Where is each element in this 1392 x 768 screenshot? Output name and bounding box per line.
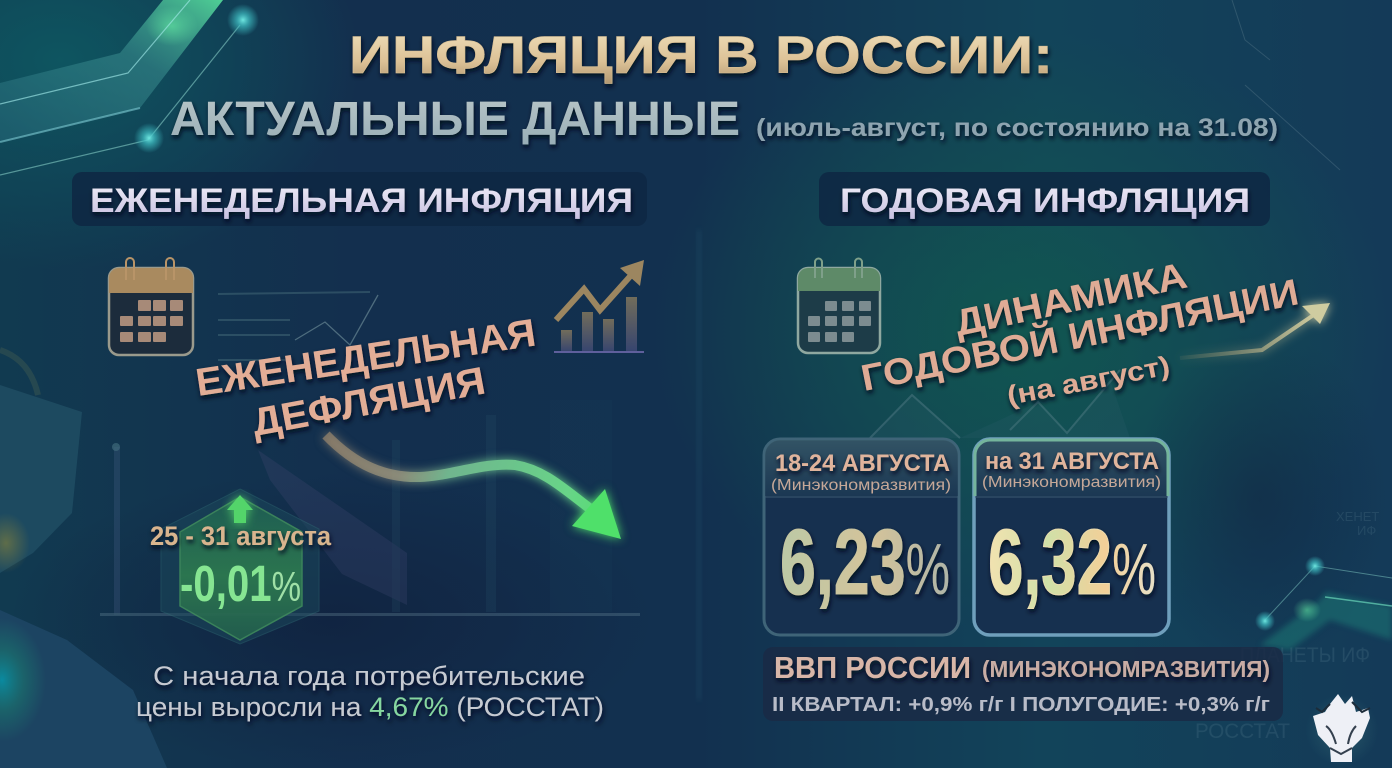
rotated label: annual dynamics: ГОДОВОЙ ИНФЛЯЦИИ (857, 270, 1302, 399)
faint ghost labels: РОССТАТ (1195, 720, 1290, 743)
title: ИНФЛЯЦИЯ В РОССИИ: (349, 26, 1053, 85)
faint ghost labels: ХЕНЕТ (1336, 509, 1379, 524)
panel: GDP of Russia (763, 647, 1283, 721)
source: (Минэкономразвития) (982, 474, 1161, 491)
subtitle: (июль-август, по состоянию на 31.08) (756, 114, 1278, 142)
rotated label: weekly deflation: ДЕФЛЯЦИЯ (249, 360, 489, 445)
icon: calendar (109, 258, 193, 355)
GDP heading: (МИНЭКОНОМРАЗВИТИЯ) (982, 656, 1270, 682)
text: year to date: цены выросли на 4,67% (РОССТАТ) (136, 692, 604, 722)
GDP values: II КВАРТАЛ: +0,9% г/г I ПОЛУГОДИЕ: +0,3% г/г (772, 694, 1270, 716)
icon: green up arrow (227, 495, 253, 523)
GDP heading (774, 650, 1270, 685)
value: 6,23% (780, 510, 950, 614)
text: year to date: С начала года потребительские (153, 661, 585, 691)
card: 18-24 August (764, 439, 959, 635)
decoration: left side shapes (0, 350, 167, 768)
value: 6,32% (988, 510, 1156, 614)
icon: calendar (798, 258, 880, 353)
icon: white wolf logo (1306, 694, 1378, 766)
decoration: top-left glowing bands (0, 0, 1340, 175)
card: on 31 August (974, 439, 1169, 635)
text: year to date (136, 661, 604, 722)
heading: annual inflation: ГОДОВАЯ ИНФЛЯЦИЯ (840, 182, 1250, 220)
arrow: curving down to the right (326, 435, 621, 539)
GDP heading: ВВП РОССИИ (774, 650, 971, 685)
hexagon: weekly value (150, 489, 332, 644)
rotated label: weekly deflation (193, 312, 539, 445)
subtitle (170, 93, 1278, 146)
panel: weekly inflation (72, 172, 647, 722)
heading: annual inflation (819, 172, 1270, 226)
decoration: faint zigzag chart, right (870, 370, 1130, 438)
rotated label: annual dynamics: (на август) (1005, 351, 1172, 411)
faint ghost labels (1195, 509, 1379, 743)
rotated label: weekly deflation: ЕЖЕНЕДЕЛЬНАЯ (193, 312, 539, 405)
date label: 18-24 АВГУСТА (775, 450, 950, 477)
icon: rising chart (554, 260, 644, 353)
panel: annual inflation (763, 172, 1330, 721)
heading: weekly inflation (72, 172, 647, 226)
faint ghost labels: ПЛАНЕТЫ ИФ (1240, 644, 1370, 667)
value: -0,01% (180, 555, 301, 612)
rotated label: annual dynamics: ДИНАМИКА (951, 255, 1191, 344)
date label: 25 - 31 августа (150, 521, 332, 551)
decoration: bottom-right glowing lines (1255, 556, 1392, 650)
subtitle: АКТУАЛЬНЫЕ ДАННЫЕ (170, 93, 740, 146)
arrow: rising line (1180, 303, 1330, 358)
decoration: faint background chart, left (100, 292, 640, 616)
heading: weekly inflation: ЕЖЕНЕДЕЛЬНАЯ ИНФЛЯЦИЯ (90, 182, 633, 220)
source: (Минэкономразвития) (771, 477, 951, 494)
faint ghost labels: ИФ (1357, 523, 1376, 538)
date label: на 31 АВГУСТА (985, 448, 1159, 475)
